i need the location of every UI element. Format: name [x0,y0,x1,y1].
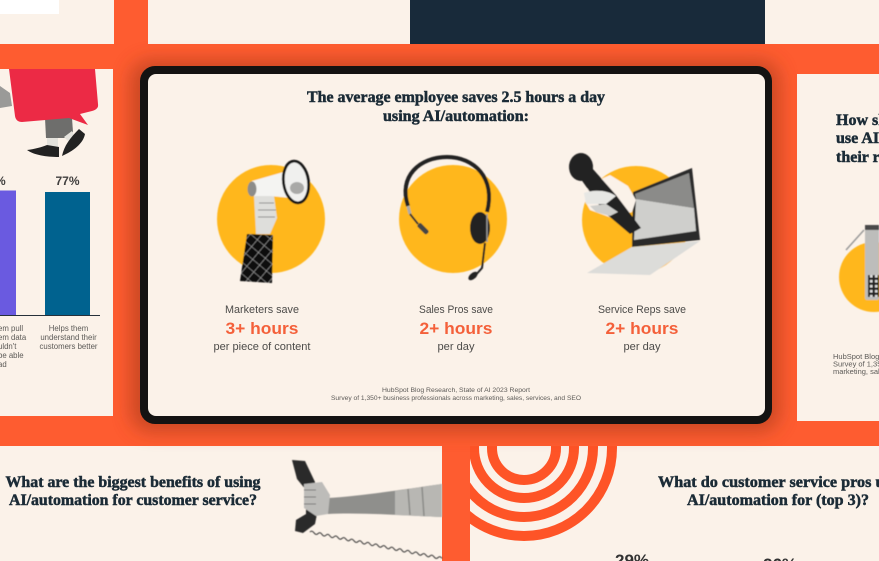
tablet screen [148,74,765,416]
text: sales pros save: Sales Pros save [419,304,493,316]
bar: purple [0,190,16,316]
icon: arm holding phone [292,460,442,558]
heading: average employee saves: using AI/automation: [383,108,529,125]
label: right bar caption: customers better [39,342,98,351]
heading: benefits: What are the biggest benefits of using [6,474,260,491]
text: marketers save: Marketers save [225,304,299,316]
icon: phone and laptop on yellow circle [569,153,700,275]
text: service reps save: Service Reps save [598,304,686,316]
icon: yellow circle with jar [839,225,879,312]
icon: concentric orange arcs [470,446,617,541]
column: service reps [569,153,700,353]
label: right bar caption: Helps them [49,324,88,333]
source note: HubSpot Blog Research, State of AI 2023 Report [382,387,530,394]
panel: right partial [797,74,879,421]
heading: customer service pros: AI/automation for (top 3)? [687,492,869,509]
stat: 3+ hours: 3+ hours [226,319,298,338]
bar: blue [45,192,90,315]
panel: left bar chart [0,69,113,416]
axis [0,315,100,316]
text: per piece of content: per piece of content [214,341,310,353]
panel: top centre [148,0,797,44]
heading: average employee saves: The average employee saves 2.5 hours a day [307,89,605,106]
heading: benefits: AI/automation for customer service? [9,492,257,509]
icon: megaphone on yellow circle [217,159,325,283]
stat: 2+ hours: 2+ hours [420,319,492,338]
panel: bottom right [470,446,879,561]
tablet shadow [130,60,780,432]
icon: red speech bubble with legs [0,69,98,157]
source note: Survey of 1,350+ business professionals across marketing, sales, services, and SEO [331,395,581,402]
tablet [140,66,772,424]
label: 77%: 77% [55,174,80,188]
text: per day: per day [438,341,475,353]
panel: bottom left [0,446,442,561]
text: per day: per day [624,341,661,353]
panel: top left [0,0,114,44]
label: right bar caption: understand their [40,333,97,342]
icon: headset on yellow circle [399,157,507,282]
column: sales pros [399,157,507,353]
panel: top right [797,0,879,44]
column: marketers [214,159,325,353]
stat: 2+ hours: 2+ hours [606,319,678,338]
